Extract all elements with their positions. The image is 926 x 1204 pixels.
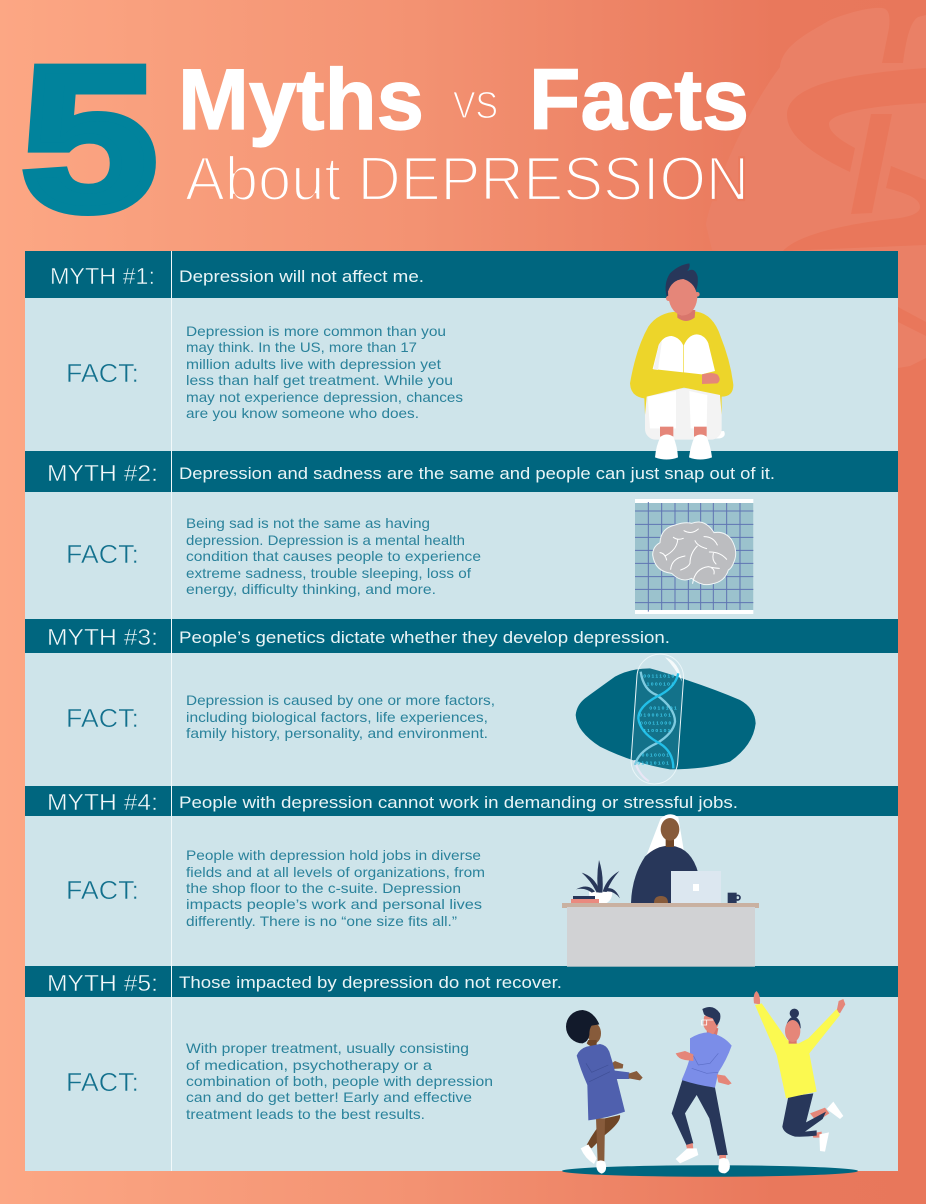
vs: VS [453, 85, 498, 127]
fact text 5: can and do get better! Early and effective [186, 1090, 472, 1105]
fact text 5: combination of both, people with depression [186, 1074, 493, 1089]
myth bar 1 [25, 251, 898, 298]
myth bar 3 [25, 619, 898, 653]
fact text 4: differently. There is no “one size fits all.” [186, 914, 458, 929]
fact text 5 [186, 1041, 493, 1122]
myth bar 2 [25, 451, 898, 492]
fact label 5: FACT: [66, 1067, 139, 1097]
About DEPRESSION: About DEPRESSION [185, 145, 749, 214]
panel: myth 1 [25, 251, 898, 421]
fact text 1: may not experience depression, chances [186, 390, 463, 405]
binary digits: 1100101 [643, 728, 672, 734]
fact text 3: family history, personality, and environment. [186, 726, 488, 741]
fact text 2: Being sad is not the same as having [186, 516, 430, 531]
fact text 1: million adults live with depression yet [186, 357, 441, 372]
big number 5: 5 [22, 24, 157, 253]
fact label 3: FACT: [66, 703, 139, 733]
binary digits [637, 673, 678, 767]
panel: myth 4 [25, 786, 898, 929]
icon: three celebrating people [566, 991, 845, 1174]
myth bar 4 [25, 786, 898, 816]
icon: person at desk [562, 814, 759, 967]
watermark: head silhouette [706, 8, 926, 420]
Myths: Myths [178, 52, 424, 148]
binary digits: 0010001 [642, 753, 670, 759]
fact text 1: less than half get treatment. While you [186, 373, 453, 388]
fact text 5: treatment leads to the best results. [186, 1107, 425, 1122]
fact text 2: condition that causes people to experience [186, 549, 481, 564]
binary digits: 0010101 [649, 705, 678, 711]
binary digits: 1000101 [647, 681, 675, 687]
fact label 4: FACT: [66, 875, 139, 905]
fact text 3: including biological factors, life experiences, [186, 710, 488, 725]
man in periwinkle sweater [672, 1007, 732, 1173]
fact text 2: energy, difficulty thinking, and more. [186, 582, 436, 597]
myth statement 5: Those impacted by depression do not recover. [179, 973, 562, 992]
icon: DNA capsule [576, 653, 756, 786]
fact text 2 [186, 516, 481, 597]
icon: sitting man [630, 263, 733, 459]
fact text 1 [186, 324, 463, 421]
jumping woman in yellow [754, 991, 845, 1152]
fact text 4 [186, 848, 485, 929]
panel: myth 5 [25, 966, 898, 1122]
column divider [171, 251, 172, 1171]
binary digits: 01000101 [639, 713, 672, 719]
icon: ground shadow [562, 1165, 858, 1177]
myth bar 5 [25, 966, 898, 997]
myth label 4: MYTH #4: [47, 789, 158, 815]
title [22, 24, 749, 253]
panel: myth 2 [25, 451, 898, 597]
myth statement 1: Depression will not affect me. [179, 267, 424, 286]
myth label 1: MYTH #1: [50, 263, 155, 289]
fact text 4: the shop floor to the c-suite. Depression [186, 881, 461, 896]
fact text 4: impacts people’s work and personal lives [186, 897, 482, 912]
fact text 1: Depression is more common than you [186, 324, 446, 339]
myth statement 2: Depression and sadness are the same and people can just snap out of it. [179, 464, 775, 483]
fact text 2: extreme sadness, trouble sleeping, loss of [186, 566, 471, 581]
binary digits: 00011000 [640, 721, 673, 727]
fact text 5: of medication, psychotherapy or a [186, 1058, 433, 1073]
fact text 1: may think. In the US, more than 17 [186, 340, 417, 355]
fact text 3 [186, 693, 495, 741]
Facts: Facts [529, 52, 749, 148]
fact text 5: With proper treatment, usually consisting [186, 1041, 469, 1056]
panel: myth 3 [25, 619, 898, 741]
fact text 1: are you know someone who does. [186, 406, 419, 421]
fact label 2: FACT: [66, 539, 139, 569]
fact text 2: depression. Depression is a mental health [186, 533, 465, 548]
myth label 2: MYTH #2: [47, 460, 158, 486]
fact text 3: Depression is caused by one or more factors, [186, 693, 495, 708]
panel: table background [25, 251, 898, 1171]
fact label 1: FACT: [66, 358, 139, 388]
myth statement 4: People with depression cannot work in demanding or stressful jobs. [179, 793, 738, 812]
myth label 3: MYTH #3: [47, 624, 158, 650]
binary digits: 00111010 [643, 673, 676, 679]
myth label 5: MYTH #5: [47, 970, 158, 996]
binary digits: 01010101 [637, 761, 670, 767]
fact text 4: fields and at all levels of organizations, from [186, 865, 485, 880]
woman in blue dress [566, 1010, 643, 1174]
fact text 4: People with depression hold jobs in diverse [186, 848, 481, 863]
icon: brain on grid [635, 499, 753, 614]
myth statement 3: People’s genetics dictate whether they develop depression. [179, 628, 670, 647]
